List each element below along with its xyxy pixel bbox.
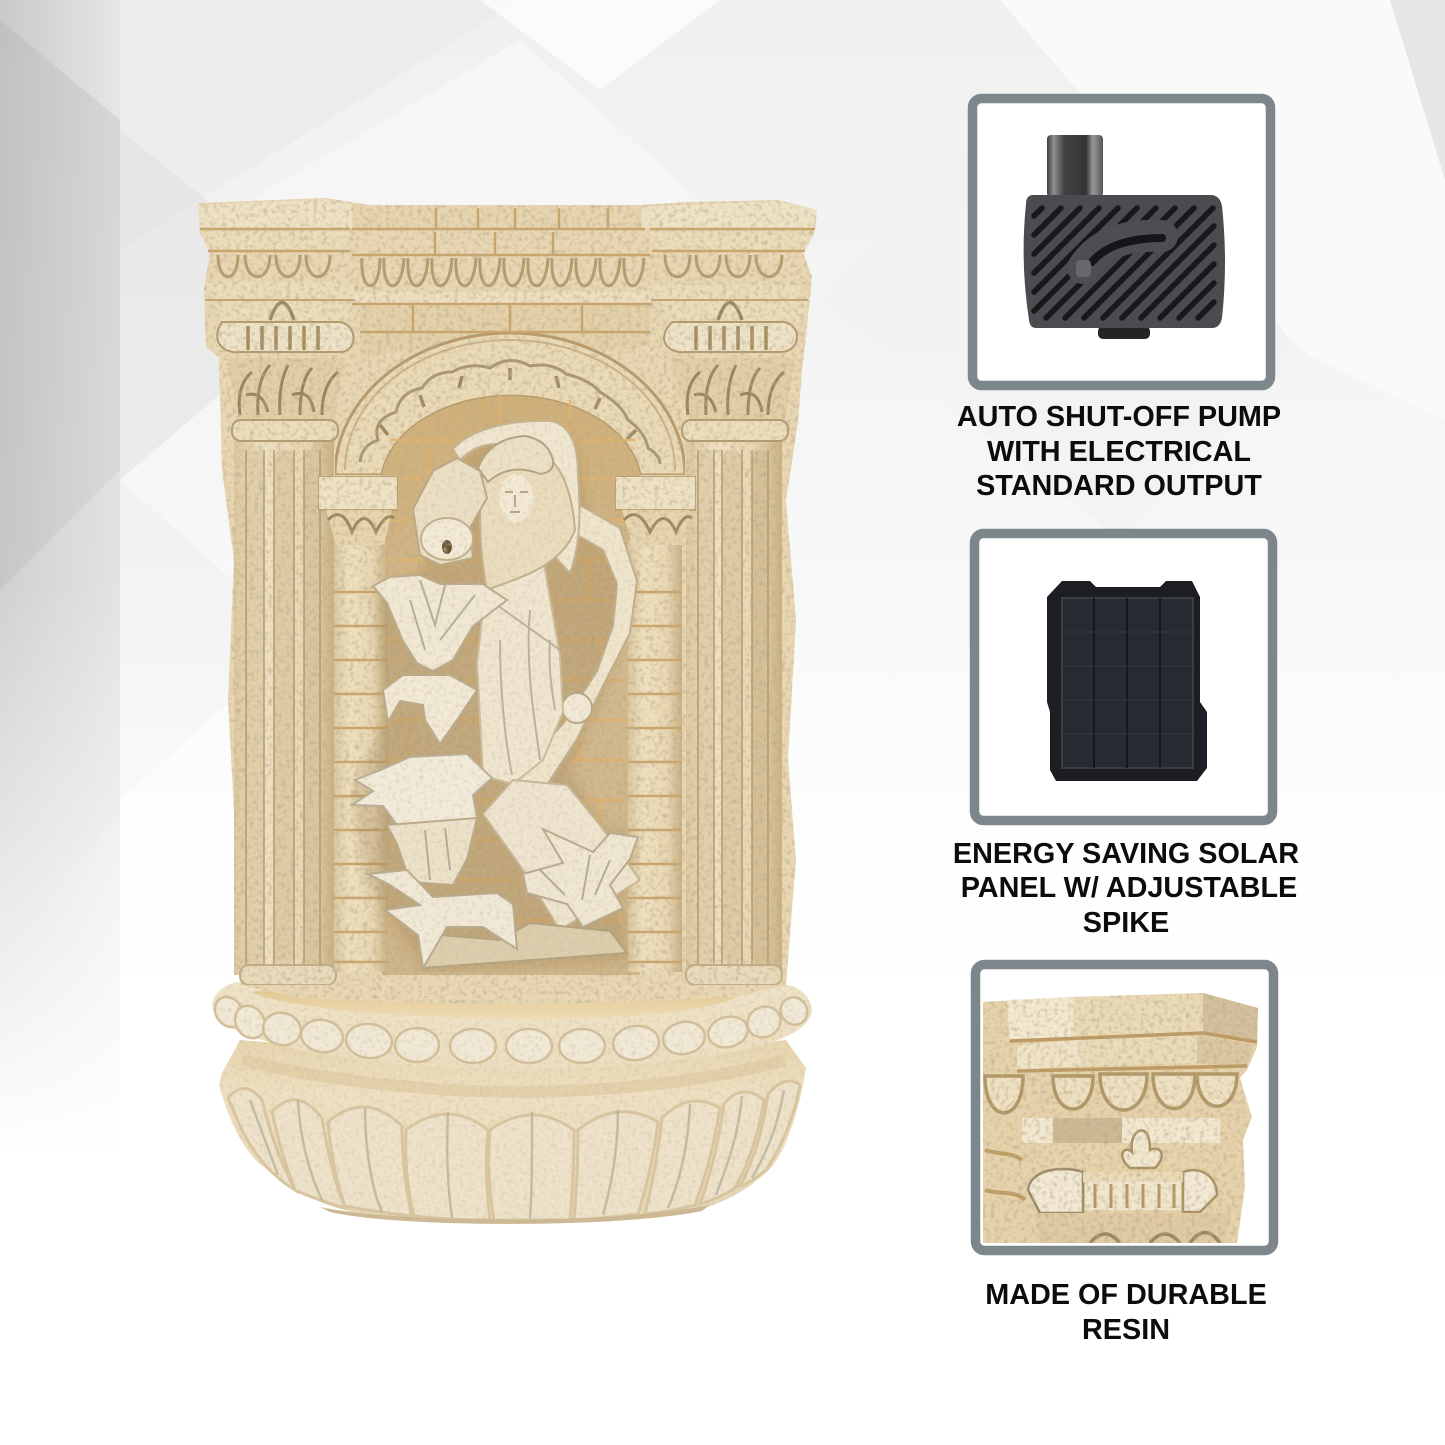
scarf <box>513 505 637 795</box>
caption: solar: ENERGY SAVING SOLAR <box>953 838 1299 870</box>
fountain <box>198 198 817 1224</box>
panel: resin <box>976 964 1274 1250</box>
pump grille slots <box>1034 208 1214 318</box>
right capital block <box>651 285 808 322</box>
panel: solar <box>974 534 1272 820</box>
basin water opening <box>252 986 738 1019</box>
big lily cup <box>387 818 477 885</box>
big lily petals <box>352 754 492 829</box>
arch <box>335 333 685 475</box>
right inner column <box>615 476 696 972</box>
resin palmette <box>1122 1130 1162 1168</box>
shadow <box>350 425 640 972</box>
upper basin rim <box>209 982 813 1069</box>
upper lily <box>373 575 507 671</box>
hanging leaves <box>383 675 477 744</box>
niche <box>382 395 640 975</box>
caption: pump: STANDARD OUTPUT <box>976 470 1262 502</box>
jug mouth <box>421 518 473 560</box>
caption: resin: MADE OF DURABLE <box>985 1279 1267 1311</box>
niche bricks <box>385 395 640 920</box>
resin frame <box>976 964 1274 1250</box>
egg ornaments <box>209 991 813 1063</box>
caption: solar: PANEL W/ ADJUSTABLE <box>961 872 1297 904</box>
right acanthus leaves <box>670 358 795 420</box>
flower crown <box>478 436 553 482</box>
icon: pump <box>1024 135 1225 339</box>
panel: pump <box>972 98 1270 386</box>
jug <box>413 458 487 565</box>
right column <box>651 285 808 985</box>
left capital block <box>205 282 355 322</box>
stone base <box>423 923 627 968</box>
pump dial <box>1083 236 1162 268</box>
top courses <box>198 199 817 360</box>
egg-and-dart band <box>218 255 782 286</box>
icon: solar panel <box>1047 581 1207 781</box>
lotus petals <box>228 1081 800 1220</box>
left inner column <box>318 476 398 972</box>
mortar lines <box>200 208 815 332</box>
fountain wall <box>198 198 817 1004</box>
resin eggs <box>985 1074 1237 1113</box>
resin close-up <box>983 993 1258 1243</box>
raised arm <box>453 421 580 573</box>
face <box>499 474 533 522</box>
caption: resin: RESIN <box>1082 1314 1170 1346</box>
caption: pump: AUTO SHUT-OFF PUMP <box>957 401 1281 433</box>
dress <box>477 558 563 784</box>
left column <box>205 282 355 985</box>
right flower <box>523 829 638 927</box>
solar frame <box>974 534 1272 820</box>
pump frame <box>972 98 1270 386</box>
base leaves <box>368 870 517 968</box>
resin capital block <box>1022 1118 1220 1143</box>
left acanthus leaves <box>226 358 345 420</box>
statue <box>350 421 640 972</box>
resin volutes <box>1028 1169 1083 1213</box>
flower on scarf <box>562 693 592 723</box>
lower drape <box>483 780 640 930</box>
caption: solar: SPIKE <box>1083 907 1169 939</box>
lower basin bowl <box>219 1040 806 1224</box>
caption: pump: WITH ELECTRICAL <box>987 436 1251 468</box>
hair <box>480 448 575 590</box>
